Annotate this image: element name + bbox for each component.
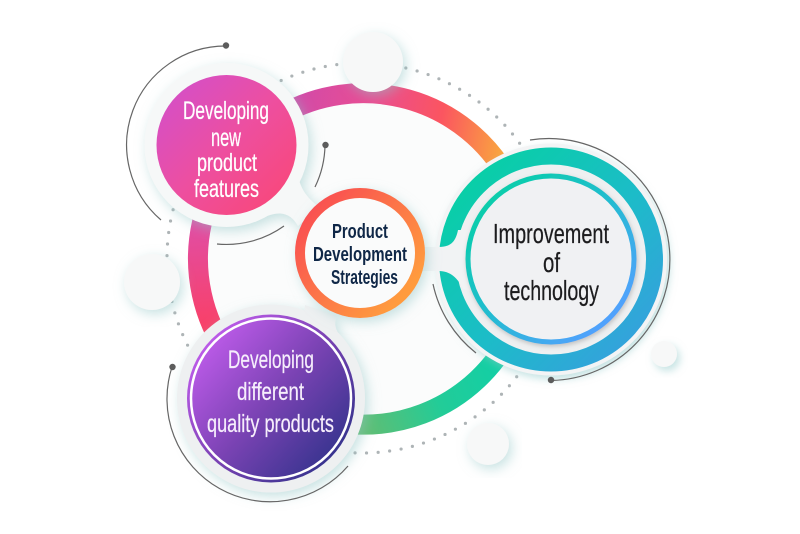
title: Development xyxy=(313,244,407,266)
dot xyxy=(322,142,329,148)
ring arc: bottom green xyxy=(300,331,513,425)
label: of xyxy=(543,247,560,278)
bubble: left xyxy=(124,254,180,310)
purple circle xyxy=(187,314,355,482)
white inner ring xyxy=(191,318,351,478)
thin arc: below xyxy=(217,226,284,244)
backing halo xyxy=(435,144,667,376)
dot xyxy=(169,364,176,370)
title xyxy=(313,221,407,289)
dotted orbit xyxy=(167,63,557,453)
inner disc background xyxy=(208,103,520,415)
dot xyxy=(223,42,229,49)
thin arc outer xyxy=(530,139,670,380)
pink circle xyxy=(156,75,296,215)
dot xyxy=(548,377,554,383)
ring arc: left red xyxy=(198,115,281,354)
bubble: right xyxy=(651,341,677,367)
label: new xyxy=(211,124,242,152)
title: Strategies xyxy=(331,267,398,289)
label: product xyxy=(197,149,257,177)
bubble: top xyxy=(343,32,403,92)
label: quality products xyxy=(207,410,334,438)
panel: improvement of technology xyxy=(418,139,670,383)
label: different xyxy=(237,378,304,406)
title: Product xyxy=(332,221,388,243)
ring arc: top pink to orange xyxy=(281,93,508,178)
bubble: bottom xyxy=(467,423,509,465)
label: Developing xyxy=(183,97,269,125)
panel: developing different quality products xyxy=(167,304,365,502)
label: Improvement xyxy=(493,218,609,249)
disc and connector xyxy=(144,63,320,227)
center circle xyxy=(300,193,420,313)
thin arc with dot xyxy=(167,367,348,502)
disc and connector xyxy=(177,304,365,492)
thin arc left xyxy=(433,284,476,353)
panel: developing new product features xyxy=(127,42,329,244)
label: features xyxy=(194,175,259,203)
label xyxy=(207,346,334,438)
panel: center xyxy=(300,193,420,313)
teal ring xyxy=(448,156,654,363)
label xyxy=(183,97,269,203)
label xyxy=(493,218,609,306)
main ring xyxy=(198,93,513,425)
label: Developing xyxy=(228,346,314,374)
thin arc: right xyxy=(315,145,325,187)
thin arc with dot xyxy=(127,46,226,220)
label: technology xyxy=(504,275,599,306)
connector neck xyxy=(418,230,474,292)
inner ring xyxy=(468,176,634,342)
